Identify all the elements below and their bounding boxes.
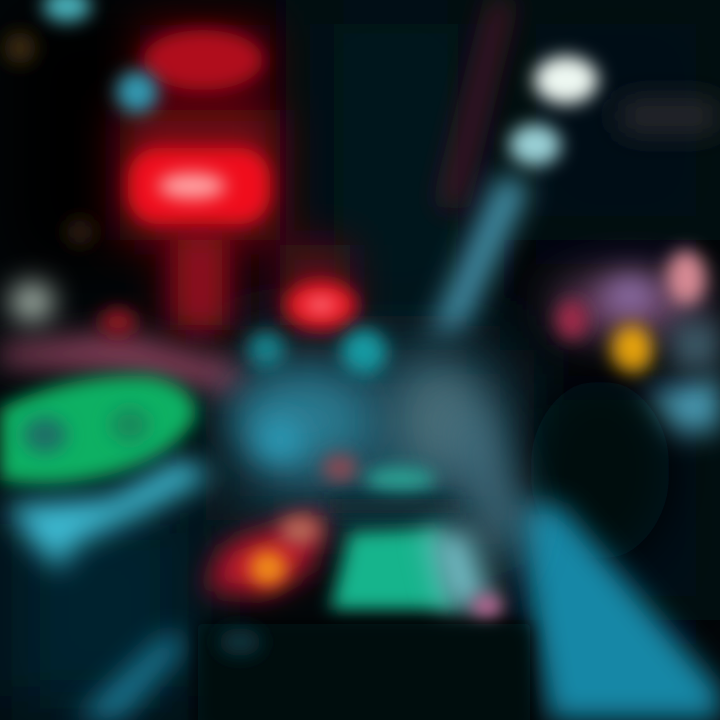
red spot [322, 454, 358, 482]
teal dot left [247, 331, 285, 369]
red lights [120, 0, 512, 330]
green shade [23, 417, 67, 453]
dim right panel [618, 98, 720, 134]
left pink band [0, 330, 240, 395]
red panel [205, 512, 325, 595]
deep red column glow [120, 25, 350, 330]
right blue band [640, 375, 720, 435]
dark silhouette [530, 380, 670, 560]
cyan streak [430, 175, 530, 335]
green spot [364, 466, 436, 494]
orange spot [249, 550, 287, 586]
red accent [100, 308, 136, 336]
violet patch [604, 277, 656, 313]
main red light [128, 148, 270, 224]
top teal dot [43, 0, 91, 22]
dark block teal glint [218, 628, 262, 656]
vertical red streak [440, 0, 512, 210]
pale left light [10, 282, 54, 322]
right colour haze [555, 275, 705, 335]
teal dot right [341, 329, 387, 375]
cyan band [5, 458, 215, 570]
teal floor [515, 505, 720, 720]
green panel [330, 528, 455, 610]
white lights and cyan streak [430, 56, 720, 335]
glass edge [440, 400, 525, 590]
green shade right [110, 407, 150, 443]
dark divider [330, 498, 460, 514]
blue dot [116, 71, 158, 113]
left cluster [0, 282, 240, 720]
yellow light [611, 325, 653, 375]
pink corner [472, 594, 502, 620]
colourful table [205, 512, 502, 620]
faint amber dots [4, 32, 36, 64]
pink light [666, 250, 706, 306]
right cluster [530, 250, 720, 560]
small red light center [305, 298, 337, 312]
center blue mass [230, 375, 370, 465]
pale pink spot [280, 516, 320, 544]
bottom cyan streak [75, 635, 190, 720]
white light [534, 56, 598, 104]
red-pink patch [556, 300, 588, 340]
green table [0, 376, 197, 484]
dark block [198, 624, 530, 720]
blue highlight [256, 418, 304, 462]
pale teal light [509, 124, 561, 166]
upper red blob [143, 30, 263, 90]
light blue panel [425, 530, 495, 610]
grey haze [395, 365, 485, 475]
small red light [285, 281, 357, 329]
main red light center [158, 173, 226, 199]
lower column [178, 240, 222, 325]
center cluster [230, 365, 485, 514]
teal dots [4, 0, 387, 375]
right grey [672, 320, 720, 370]
